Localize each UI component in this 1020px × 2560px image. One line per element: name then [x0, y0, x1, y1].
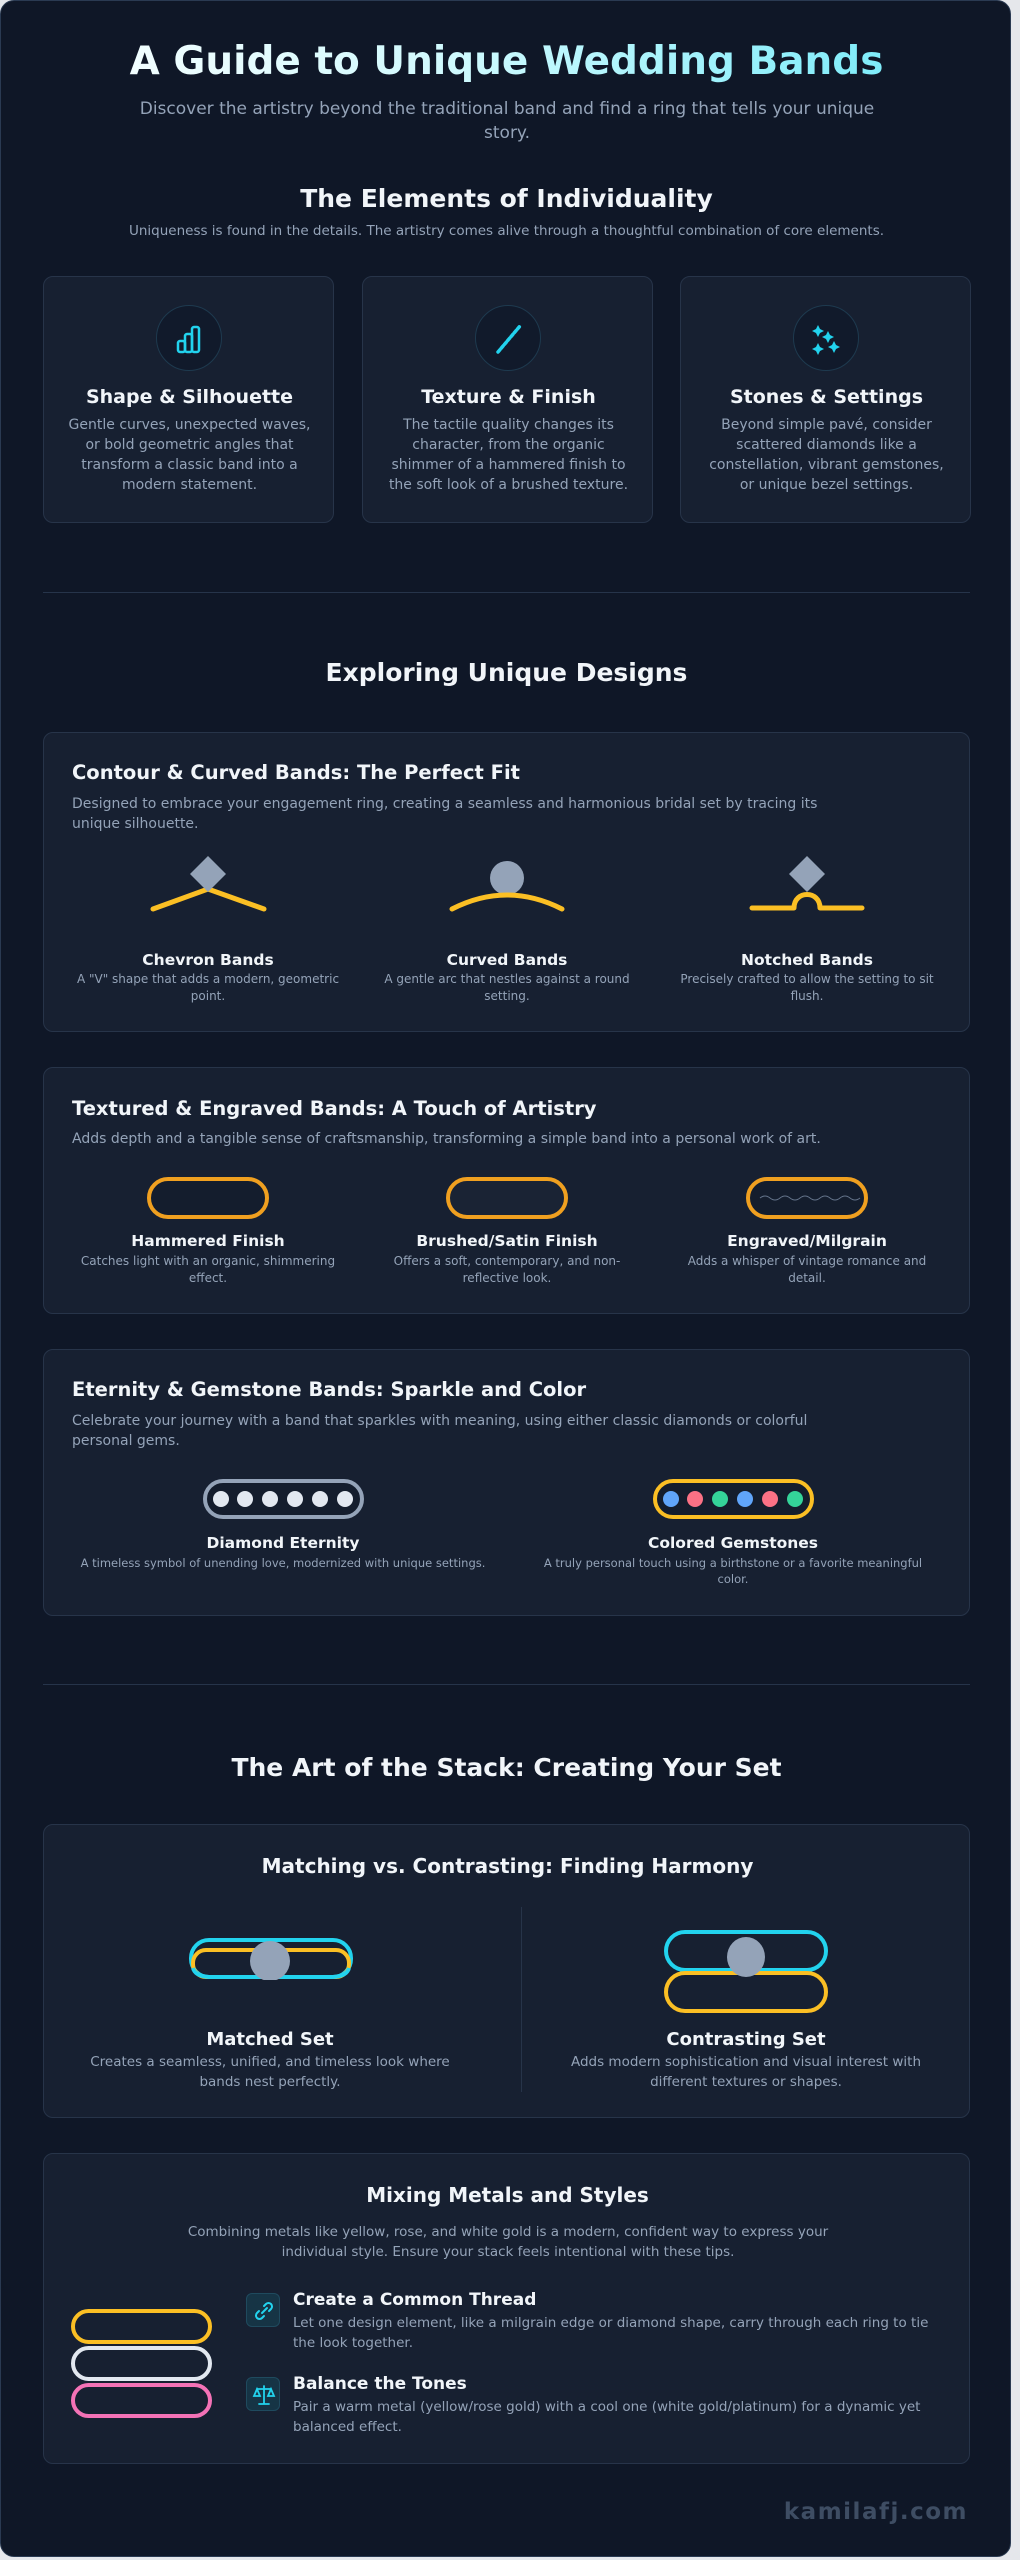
panel title: Eternity & Gemstone Bands: Sparkle and Color [72, 1378, 586, 1401]
panel text: Celebrate your journey with a band that sparkles with meaning, using either classic diamonds or colorful personal gems. [72, 1413, 807, 1449]
desc: Offers a soft, contemporary, and non-reflective look. [394, 1254, 620, 1285]
heading: stack: The Art of the Stack: Creating Your Set [231, 1753, 782, 1782]
icon: chevron band [150, 856, 266, 912]
panel: matching vs contrasting [43, 1824, 970, 2118]
item: colored gemstones [544, 1479, 922, 1586]
panel title: Contour & Curved Bands: The Perfect Fit [72, 761, 520, 784]
icon: gemstone ring [653, 1479, 814, 1519]
tip title: Balance the Tones [293, 2374, 467, 2394]
panel text: Designed to embrace your engagement ring, creating a seamless and harmonious bridal set by tracing its unique silhouette. [72, 796, 817, 832]
card text: Beyond simple pavé, consider scattered diamonds like a constellation, vibrant gemstones, or unique bezel settings. [709, 417, 944, 493]
icon: sparkles [793, 305, 859, 371]
panel text: Adds depth and a tangible sense of craftsmanship, transforming a simple band into a personal work of art. [72, 1131, 821, 1147]
panel: mixing metals [43, 2153, 970, 2464]
desc: A gentle arc that nestles against a round setting. [384, 972, 630, 1003]
subtitle: Discover the artistry beyond the traditional band and find a ring that tells your unique story. [140, 99, 874, 143]
label: Hammered Finish [131, 1232, 285, 1250]
panel: contour [43, 732, 970, 1032]
desc: Adds a whisper of vintage romance and detail. [688, 1254, 926, 1285]
item: engraved [688, 1177, 926, 1285]
icon: bars [156, 305, 222, 371]
heading: elements: The Elements of Individuality [300, 184, 713, 213]
item: notched [680, 856, 934, 1003]
desc: Catches light with an organic, shimmering effect. [81, 1254, 335, 1285]
elements intro: Uniqueness is found in the details. The artistry comes alive through a thoughtful combination of core elements. [129, 223, 884, 239]
label: Curved Bands [447, 951, 567, 969]
panel text: Combining metals like yellow, rose, and white gold is a modern, confident way to express your individual style. Ensure your stack feels intentional with these tips. [188, 2224, 828, 2260]
card title: Stones & Settings [730, 386, 923, 408]
desc: A truly personal touch using a birthstone or a favorite meaningful color. [544, 1556, 922, 1586]
icon: link [246, 2293, 280, 2327]
panel title: Textured & Engraved Bands: A Touch of Artistry [72, 1097, 597, 1120]
icon: brush stroke [475, 305, 541, 371]
icon: hammered ring [147, 1177, 269, 1219]
icon: scales [246, 2377, 280, 2411]
label: Colored Gemstones [648, 1534, 818, 1552]
icon: curved band [450, 861, 564, 912]
item: hammered [81, 1177, 335, 1285]
label: Diamond Eternity [206, 1534, 359, 1552]
card: stones [680, 276, 971, 523]
card: shape [43, 276, 334, 523]
card text: The tactile quality changes its character, from the organic shimmer of a hammered finish to the soft look of a brushed texture. [389, 417, 628, 493]
heading: exploring: Exploring Unique Designs [326, 658, 687, 687]
desc: Adds modern sophistication and visual interest with different textures or shapes. [571, 2054, 921, 2090]
panel: eternity [43, 1349, 970, 1616]
item: brushed [394, 1177, 620, 1285]
label: Matched Set [206, 2029, 334, 2050]
icon: diamond ring [203, 1479, 364, 1519]
icon: brushed ring [446, 1177, 568, 1219]
item: curved [384, 861, 630, 1003]
icon: contrasting rings [664, 1930, 828, 2013]
desc: Precisely crafted to allow the setting to sit flush. [680, 972, 934, 1003]
item: diamond eternity [80, 1479, 485, 1570]
card title: Shape & Silhouette [86, 386, 293, 408]
panel title: Mixing Metals and Styles [366, 2183, 649, 2207]
tip: balance [246, 2374, 920, 2435]
label: Chevron Bands [142, 951, 274, 969]
icon: notched band [750, 856, 864, 910]
icon: stacked metal rings [71, 2309, 212, 2418]
icon: matched rings [189, 1938, 353, 1980]
panel: textured [43, 1067, 970, 1314]
tip title: Create a Common Thread [293, 2290, 536, 2310]
label: Notched Bands [741, 951, 873, 969]
desc: A "V" shape that adds a modern, geometric point. [77, 972, 339, 1003]
desc: Creates a seamless, unified, and timeless look where bands nest perfectly. [90, 2054, 450, 2090]
tip text: Let one design element, like a milgrain edge or diamond shape, carry through each ring to tie the look together. [293, 2315, 928, 2351]
tip text: Pair a warm metal (yellow/rose gold) with a cool one (white gold/platinum) for a dynamic yet balanced effect. [293, 2399, 920, 2435]
item: matched set [90, 1938, 450, 2090]
panel title: Matching vs. Contrasting: Finding Harmony [262, 1854, 753, 1878]
card text: Gentle curves, unexpected waves, or bold geometric angles that transform a classic band into a modern statement. [69, 417, 310, 493]
label: Contrasting Set [666, 2029, 826, 2050]
label: Engraved/Milgrain [727, 1232, 887, 1250]
label: Brushed/Satin Finish [416, 1232, 598, 1250]
icon: engraved ring [746, 1177, 868, 1219]
footer brand: kamilafj.com [784, 2499, 968, 2525]
title: A Guide to Unique Wedding Bands [130, 39, 883, 84]
card: texture [362, 276, 653, 523]
tip: common thread [246, 2290, 928, 2351]
item: contrasting set [571, 1930, 921, 2090]
card title: Texture & Finish [421, 386, 596, 408]
item: chevron [77, 856, 339, 1003]
desc: A timeless symbol of unending love, modernized with unique settings. [81, 1556, 485, 1570]
